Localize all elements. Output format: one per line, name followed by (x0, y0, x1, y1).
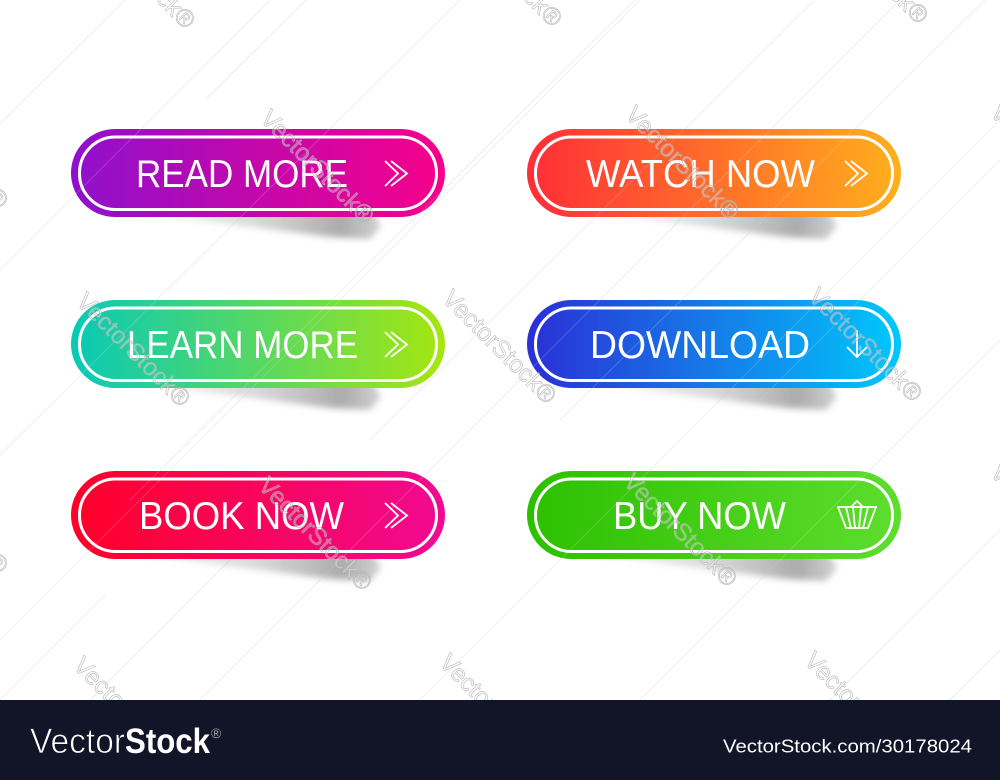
watermarks: VectorStock® (71, 288, 195, 412)
button: buy now: BUY NOW (613, 495, 786, 538)
icon: double chevron (845, 161, 867, 186)
icon: double chevron (385, 332, 407, 357)
watermarks: VectorStock® (620, 101, 744, 225)
footer image id: VectorStock.com/30178024 (723, 736, 972, 756)
button shadows (120, 210, 837, 581)
button: book now (71, 471, 445, 559)
button: learn more (71, 300, 445, 388)
button: book now: BOOK NOW (139, 495, 344, 538)
button: read more (71, 129, 445, 217)
footer logo: ® (211, 725, 222, 741)
watermarks: VectorStock® (255, 105, 379, 229)
watermarks: VectorStock® (434, 649, 558, 773)
button: read more: READ MORE (136, 153, 348, 196)
watermarks: VectorStock® (68, 652, 192, 776)
footer logo: Stock (125, 722, 210, 761)
icon: down arrow (847, 330, 867, 357)
footer logo: Vector (30, 722, 125, 761)
watermarks: VectorStock® (253, 472, 377, 596)
icon: double chevron (385, 503, 407, 528)
icon: shopping basket (837, 501, 877, 528)
watermarks: VectorStock® (437, 285, 561, 409)
watermarks: VectorStock® (803, 283, 927, 407)
button: download: DOWNLOAD (590, 324, 810, 367)
footer bar (0, 700, 1000, 780)
button: learn more: LEARN MORE (127, 324, 358, 367)
button: download (527, 300, 901, 388)
watermarks: VectorStock® (799, 647, 923, 771)
button: watch now (527, 129, 901, 217)
button: watch now: WATCH NOW (586, 153, 815, 196)
watermarks: VectorStock® (618, 468, 742, 592)
footer logo (30, 722, 222, 761)
icon: double chevron (385, 161, 407, 186)
button: buy now (527, 471, 901, 559)
